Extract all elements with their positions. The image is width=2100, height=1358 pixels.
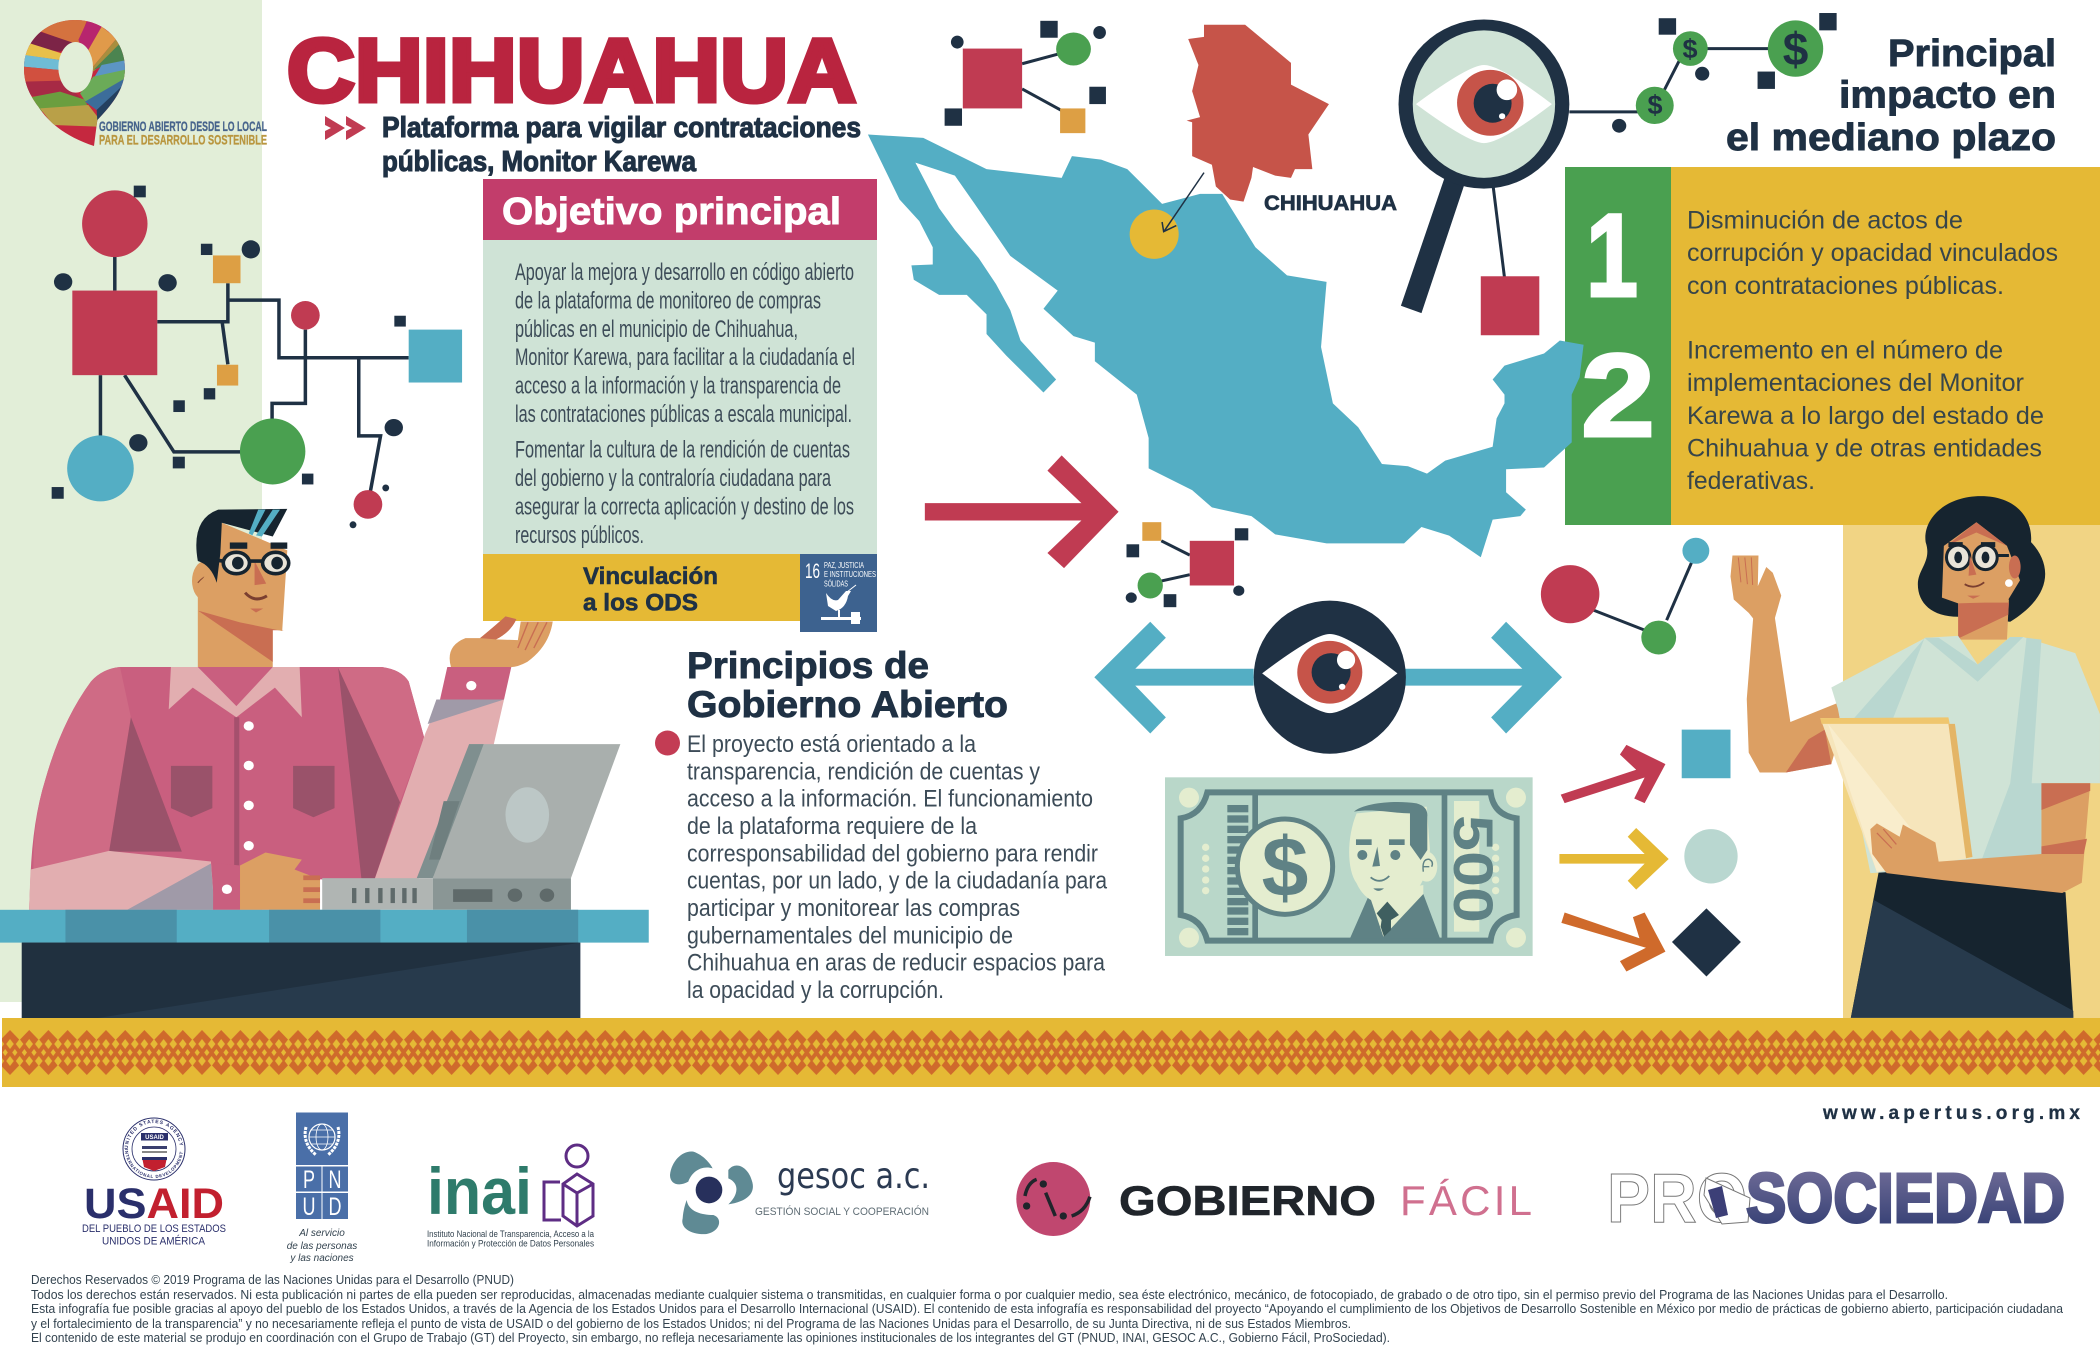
number 1: 1 [1586,190,1638,322]
raised arm [1747,617,1841,772]
icon: SDG 16 badge: E INSTITUCIONES [824,570,876,579]
illustration: man at desk with laptop [0,509,649,1019]
heading: principal impacto en el mediano plazo: impacto en [1839,74,2056,116]
logo: GESOC: gesoc a.c. [777,1156,930,1197]
subtitle: públicas, Monitor Karewa [382,146,697,178]
neck [1958,600,2009,640]
objective text [515,259,855,549]
arrow: double chevron [325,116,366,140]
impact text 1: con contrataciones públicas. [1687,272,2004,300]
legal text: y el fortalecimiento de la transparencia” y no necesariamente refleja el punto de vista de USAID o del gobierno de los Estados Unidos; ni del Programa de las Naciones Unidas para el Desarrollo, de su Junta Directiva, ni de sus Estados Miembros. [31,1317,1351,1331]
seal [122,1118,186,1180]
illustration: woman with notepad [1730,496,2100,1018]
logo: PNUD: D [328,1193,342,1221]
text: principios de gobierno abierto: acceso a la información. El funcionamiento [687,786,1093,813]
text: principios de gobierno abierto: la opacidad y la corrupción. [687,977,944,1004]
logo: Gobierno Abierto desde lo local [20,17,267,150]
network: below map [1126,522,1248,607]
network: dollar nodes: $ [1682,34,1698,64]
logo: PNUD: U [302,1193,316,1221]
text: principios de gobierno abierto: corresponsabilidad del gobierno para rendir [687,840,1098,867]
objective text: de la plataforma de monitoreo de compras [515,288,821,314]
heading: principal impacto en el mediano plazo [1726,33,2056,159]
lower forearm [29,851,215,910]
legal text: Todos los derechos están reservados. Ni esta publicación ni partes de ella pueden ser reproducidas, almacenadas mediante cualquier sistema o transmitidas, en cualquier forma o por cualquier medio, sea éste electrónico, mecánico, de fotocopiado, de grabado o de otro tipo, sin el permiso previo del Programa de las Naciones Unidas para el Desarrollo. [31,1288,1948,1302]
panel: woman background [1843,525,2100,1018]
text: principios de gobierno abierto: transparencia, rendición de cuentas y [687,758,1040,785]
right arm [1870,783,2090,893]
objective text: asegurar la correcta aplicación y destino de los [515,494,854,520]
logo: Gobierno Fácil: GOBIERNO [1119,1177,1376,1224]
legal text: Esta infografía fue posible gracias al apoyo del pueblo de los Estados Unidos, a través de la Agencia de los Estados Unidos para el Desarrollo Internacional (USAID). El contenido de esta infografía es responsabilidad del proyecto “Apoyando el cumplimiento de los Objetivos de Desarrollo Sostenible en México por medio de prácticas de gobierno abierto, participación ciudadana [31,1302,2063,1316]
network: dollar nodes: $ [1647,90,1663,120]
icon: rainbow location pin [24,20,125,146]
impact text 2: Incremento en el número de [1687,337,2003,365]
seal: USAID [145,1135,164,1141]
icon: SDG 16 badge: PAZ, JUSTICIA [824,561,864,570]
logo: USAID [82,1118,226,1248]
legal text: El contenido de este material se produjo en coordinación con el Grupo de Trabajo (GT) del Proyecto, sin embargo, no refleja necesariamente las opiniones institucionales de los integrantes del GT (PNUD, INAI, GESOC A.C., Gobierno Fácil, ProSociedad). [31,1331,1390,1345]
logo: ProSociedad [1607,1159,2065,1237]
objective text: Fomentar la cultura de la rendición de cuentas [515,436,850,464]
objective text: las contrataciones públicas a escala municipal. [515,401,852,428]
network: dollar nodes: $ [1783,23,1808,75]
website url: www.apertus.org.mx [1822,1103,2080,1124]
logo: PNUD: Al servicio [298,1228,345,1239]
logo: PNUD: de las personas [287,1241,357,1252]
yellow SDG band [483,554,800,621]
network: dollar nodes [1569,13,1837,133]
icon: eye with double-headed arrow [1094,601,1562,754]
network diagram: left [52,186,462,528]
panel body [483,240,877,554]
face [1942,522,2020,603]
notepad [1820,718,1971,872]
left pale green background [0,0,262,1002]
map: location marker [1130,209,1179,259]
network: top center [945,21,1106,133]
SDG link label: Vinculación [583,563,718,590]
icon: magnifying glass with eye [1399,20,1569,335]
heading: principios de gobierno abierto: Principios de [687,645,929,686]
objective text: del gobierno y la contraloría ciudadana para [515,465,831,492]
objective text: públicas en el municipio de Chihuahua, [515,316,798,343]
logo: GESOC [670,1151,930,1234]
logo: INAI: Información y Protección de Datos Personales [427,1238,594,1248]
impact text 2 [1687,337,2044,495]
panel: objetivo principal [483,179,877,632]
logo: Gobierno Fácil: FÁCIL [1400,1177,1532,1224]
USAID wordmark: USAID [84,1180,224,1228]
USAID tagline [82,1223,226,1248]
logo: PNUD: y las naciones [289,1253,354,1264]
neck [198,610,273,707]
text: principios de gobierno abierto: El proyecto está orientado a la [687,731,977,758]
seal: UNITED STATES AGENCY [124,1120,184,1149]
heading: principios de gobierno abierto: Gobierno Abierto [687,684,1008,725]
logo: INAI: inai [427,1154,532,1228]
subtitle [382,112,861,178]
illustration: man's raised hand holding panel [450,616,553,667]
icon: 500 banknote: 500 [1442,815,1505,923]
shape: pale circle [1684,829,1738,883]
head [192,561,218,601]
icon: SDG 16 badge [800,554,877,632]
impact text 1: corrupción y opacidad vinculados [1687,239,2058,267]
USAID tagline: DEL PUEBLO DE LOS ESTADOS [82,1223,226,1235]
text: principios de gobierno abierto [687,731,1108,1004]
heading: principal impacto en el mediano plazo: el mediano plazo [1726,117,2056,159]
heading: Objetivo principal [502,191,841,233]
raised sleeve [375,699,504,879]
logo: GESOC: GESTIÓN SOCIAL Y COOPERACIÓN [755,1205,929,1218]
heading: principal impacto en el mediano plazo: Principal [1888,33,2056,75]
text: principios de gobierno abierto: gubernamentales del municipio de [687,922,1013,949]
objective text: Monitor Karewa, para facilitar a la ciudadanía el [515,344,855,371]
map: Mexico [868,134,1584,557]
impact text 1 [1687,206,2058,300]
decorative band [2,1018,2100,1087]
map of Mexico with Chihuahua [868,25,1584,557]
network: three circles [1541,538,1709,654]
shape: dark diamond [1672,908,1741,976]
impact text 2: federativas. [1687,467,1815,495]
text: principios de gobierno abierto: cuentas, por un lado, y de la ciudadanía para [687,868,1108,895]
SDG link label [583,563,718,616]
arrow: red pointing to map [925,455,1119,568]
icon: 500 banknote: $ [1262,820,1308,914]
hair [1918,496,2045,622]
arrows to shapes [1559,730,1741,976]
logo: PNUD [287,1112,357,1264]
map: Chihuahua state [1187,25,1329,202]
objective text: Apoyar la mejora y desarrollo en código abierto [515,259,854,286]
panel: principal impacto background [1565,167,2100,525]
laptop [433,744,620,878]
icon: 500 banknote [1165,777,1533,956]
bullet [655,730,680,756]
heading: principios de gobierno abierto [687,645,1008,725]
panel header [483,179,877,240]
text: principios de gobierno abierto: de la plataforma requiere de la [687,813,978,840]
text: principios de gobierno abierto: Chihuahua en aras de reducir espacios para [687,950,1106,977]
logo: INAI: Instituto Nacional de Transparencia, Acceso a la [427,1229,594,1239]
logo text line 1: GOBIERNO ABIERTO DESDE LO LOCAL [99,119,267,134]
shape: blue square [1682,730,1730,778]
impact text 1: Disminución de actos de [1687,206,1963,234]
logo: ProSociedad: PRO [1607,1159,1747,1237]
logo: Gobierno Fácil [1016,1162,1532,1236]
objective text: recursos públicos. [515,522,644,549]
impact text 2: Chihuahua y de otras entidades [1687,434,2042,462]
arrow: yellow to circle [1559,828,1669,890]
icon: SDG 16 badge: 16 [805,560,820,583]
skirt [1851,871,2073,1018]
title: CHIHUAHUA [287,20,856,120]
desk [0,910,649,943]
logo text line 2: PARA EL DESARROLLO SOSTENIBLE [99,132,267,148]
shirt [29,667,424,910]
subtitle: Plataforma para vigilar contrataciones [382,112,861,144]
seal: INTERNATIONAL DEVELOPMENT [125,1149,183,1178]
legal text: Derechos Reservados © 2019 Programa de las Naciones Unidas para el Desarrollo (PNUD) [31,1273,514,1287]
USAID tagline: UNIDOS DE AMÉRICA [102,1234,206,1248]
impact text 2: Karewa a lo largo del estado de [1687,402,2044,430]
raised hand [1730,555,1781,619]
text: principios de gobierno abierto: participar y monitorear las compras [687,895,1020,922]
arrow: orange to diamond [1561,913,1665,971]
icon: SDG 16 badge: SÓLIDAS [824,580,848,588]
legal text [31,1273,2063,1345]
label: Chihuahua: CHIHUAHUA [1264,192,1397,215]
objective text: acceso a la información y la transparencia de [515,372,841,400]
logo: PNUD: N [328,1166,342,1194]
impact text 2: implementaciones del Monitor [1687,369,2024,397]
arrow: from state to marker [1162,173,1204,232]
number 2: 2 [1581,330,1655,462]
SDG link label: a los ODS [583,590,698,616]
logo: INAI [427,1145,594,1248]
blouse [1831,636,2100,873]
arrow: red to square [1561,745,1665,803]
logo: PNUD: P [303,1166,315,1194]
